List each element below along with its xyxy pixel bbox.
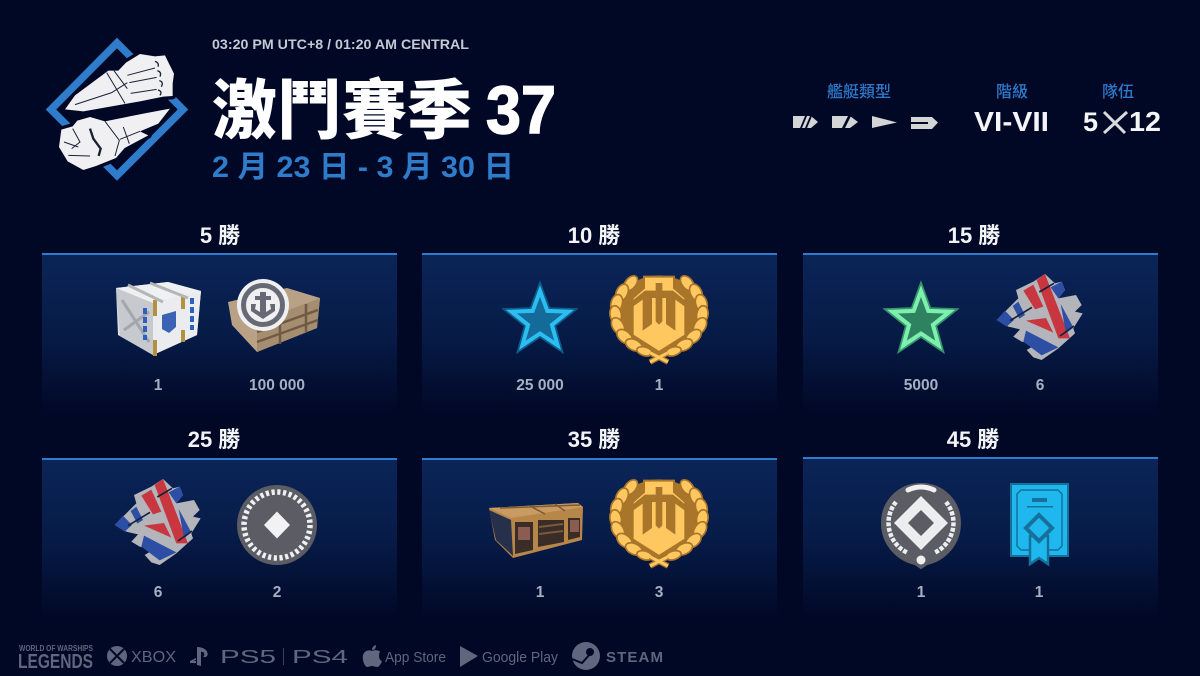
- panel: 25 wins: 25 勝: [188, 427, 240, 452]
- panel: 25 wins: 6: [154, 584, 163, 601]
- logo: World of Warships Legends: [18, 644, 94, 673]
- icon: blue star: [512, 291, 568, 345]
- icon: grey ring badge: [237, 485, 317, 565]
- time line: 03:20 PM UTC+8 / 01:20 AM CENTRAL: [212, 36, 469, 52]
- panel: 10 wins: 10 勝: [568, 223, 620, 248]
- tier: VI-VII: [974, 106, 1049, 137]
- team: [1083, 83, 1161, 137]
- panel: 5 wins: 1: [154, 377, 163, 394]
- panel: 5 wins: 100 000: [249, 377, 305, 394]
- panel: 10 wins: 25 000: [516, 377, 564, 394]
- ship type: [793, 83, 938, 129]
- panel: 45 wins: 1: [917, 584, 926, 601]
- panel: 15 wins: 15 勝: [948, 223, 1000, 248]
- panel: 35 wins: 1: [536, 584, 545, 601]
- panel: 5 wins: [42, 223, 397, 413]
- icon: ship classes: [793, 116, 938, 129]
- icon: wooden crate with credits coin: [228, 279, 320, 352]
- icon: gold medal: [609, 477, 709, 566]
- icon: brown crate: [489, 503, 583, 558]
- panel: 35 wins: 35 勝: [568, 427, 620, 452]
- logo: armoured fists in diamond: [51, 43, 183, 176]
- tier: [974, 83, 1049, 137]
- icon: blue certificate: [1011, 484, 1068, 564]
- icon: green star: [892, 291, 950, 345]
- logo: World of Warships Legends: LEGENDS: [18, 651, 93, 673]
- icon: signal flag: [997, 274, 1083, 360]
- logo: PS5 and PS4: PS5: [220, 647, 276, 667]
- icon: signal flag: [115, 479, 201, 565]
- logo: App Store: [363, 645, 446, 667]
- panel: 10 wins: 1: [655, 377, 664, 394]
- icon: white crate: [116, 282, 201, 356]
- logo: App Store: App Store: [385, 649, 446, 666]
- panel: 15 wins: 6: [1036, 377, 1045, 394]
- logo: PS5 and PS4: [190, 647, 348, 667]
- title: 37: [486, 72, 556, 148]
- panel: 35 wins: [422, 427, 777, 618]
- logo: Steam: STEAM: [606, 649, 663, 666]
- logo: PS5 and PS4: PS4: [292, 647, 348, 667]
- team: 5: [1083, 107, 1098, 137]
- icon: gold medal: [609, 273, 709, 362]
- panel: 15 wins: [803, 223, 1158, 413]
- logo: Google Play: Google Play: [482, 649, 558, 666]
- panel: 10 wins: [422, 223, 777, 413]
- ship type: 艦艇類型: [827, 83, 891, 101]
- title: 激鬥賽季: [212, 58, 472, 152]
- icon: laurel diamond badge: [882, 484, 960, 568]
- panel: 15 wins: 5000: [904, 377, 938, 394]
- team: 12: [1129, 106, 1161, 137]
- panel: 45 wins: [803, 427, 1158, 617]
- panel: 45 wins: 45 勝: [947, 427, 999, 452]
- panel: 5 wins: 5 勝: [200, 223, 240, 248]
- tier: 階級: [996, 83, 1028, 101]
- logo: World of Warships Legends: WORLD OF WARSHIPS: [19, 644, 94, 653]
- team: 隊伍: [1102, 83, 1134, 101]
- footer: platform logos: [18, 642, 663, 673]
- panel: 45 wins: 1: [1035, 584, 1044, 601]
- logo: Xbox: XBOX: [131, 649, 176, 666]
- panel: 35 wins: 3: [655, 584, 664, 601]
- date range: 2 月 23 日 - 3 月 30 日: [212, 151, 514, 184]
- logo: Google Play: [460, 646, 558, 667]
- logo: Xbox: [107, 646, 176, 666]
- logo: Steam: [572, 642, 663, 670]
- panel: 25 wins: [42, 427, 397, 618]
- panel: 25 wins: 2: [273, 584, 281, 601]
